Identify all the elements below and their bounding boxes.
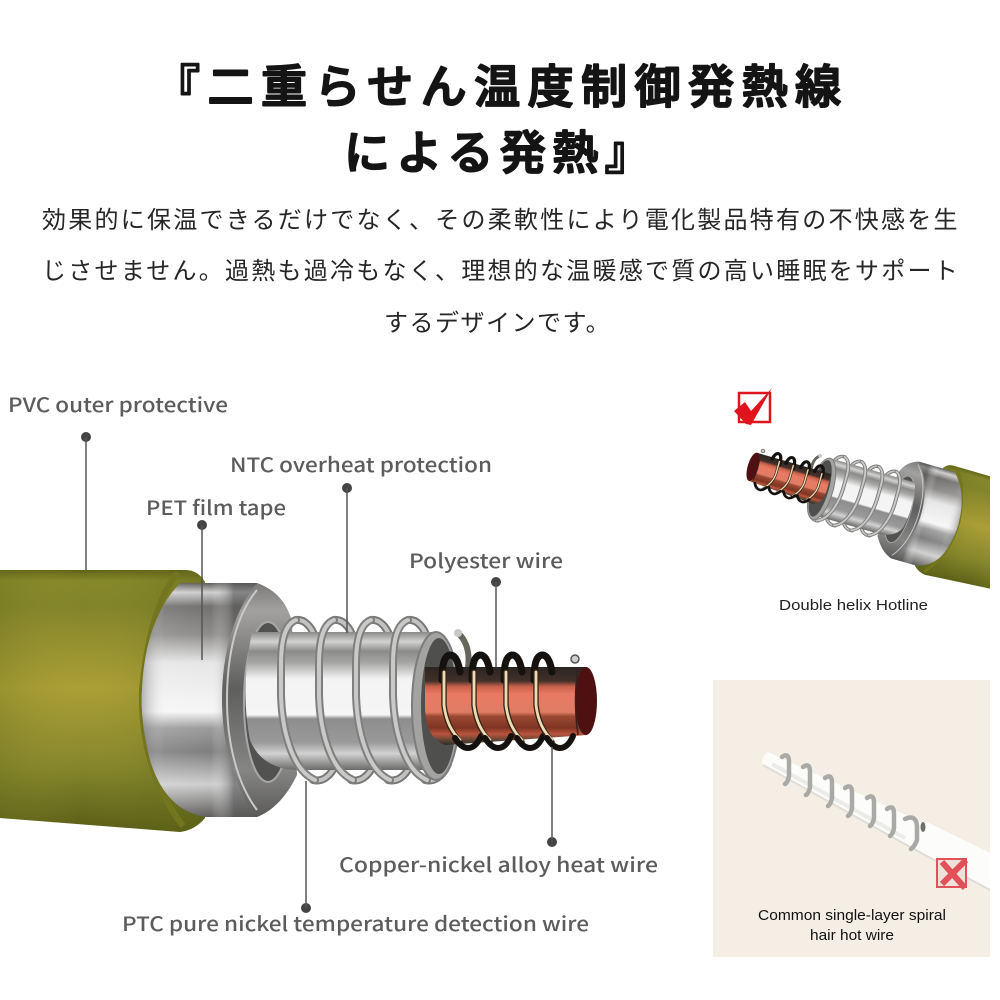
caption: common single-layer <box>758 907 946 944</box>
label: PTC pure nickel temperature detection wire <box>122 781 589 937</box>
label: Copper-nickel alloy heat wire <box>339 747 658 878</box>
caption: common single-layer: hair hot wire <box>810 927 894 944</box>
label: Polyester wire <box>409 545 563 667</box>
label: PTC pure nickel temperature detection wire: PTC pure nickel temperature detection wire <box>122 908 589 937</box>
caption: double helix: Double helix Hotline <box>779 597 928 614</box>
icon: red cross mark <box>937 859 966 888</box>
label: PET film tape <box>146 492 286 660</box>
diagram: white single-layer wire <box>762 752 990 890</box>
title: による発熱』 <box>344 117 657 183</box>
label: PET film tape: PET film tape <box>146 492 286 521</box>
description text: するデザインです。 <box>384 310 611 337</box>
label: NTC overheat protection: NTC overheat protection <box>230 449 492 478</box>
title: 『二重らせん温度制御発熱線 <box>154 51 849 117</box>
label: Polyester wire: Polyester wire <box>409 545 563 574</box>
diagram: double helix wire <box>746 448 990 589</box>
label: PVC outer protective <box>8 389 228 570</box>
description text: じさせません。過熱も過冷もなく、理想的な温暖感で質の高い睡眠をサポート <box>42 258 960 285</box>
description text: 効果的に保温できるだけでなく、その柔軟性により電化製品特有の不快感を生 <box>42 207 960 234</box>
panel: common single-layer wire <box>713 680 990 957</box>
label: Copper-nickel alloy heat wire: Copper-nickel alloy heat wire <box>339 849 658 878</box>
diagram: main heating wire cross-section <box>0 570 597 832</box>
label: PVC outer protective: PVC outer protective <box>8 389 228 418</box>
label: NTC overheat protection <box>230 449 492 633</box>
icon: red check mark <box>734 388 772 425</box>
description text <box>42 207 960 337</box>
caption: common single-layer: Common single-layer spiral <box>758 907 946 924</box>
title <box>154 51 849 183</box>
